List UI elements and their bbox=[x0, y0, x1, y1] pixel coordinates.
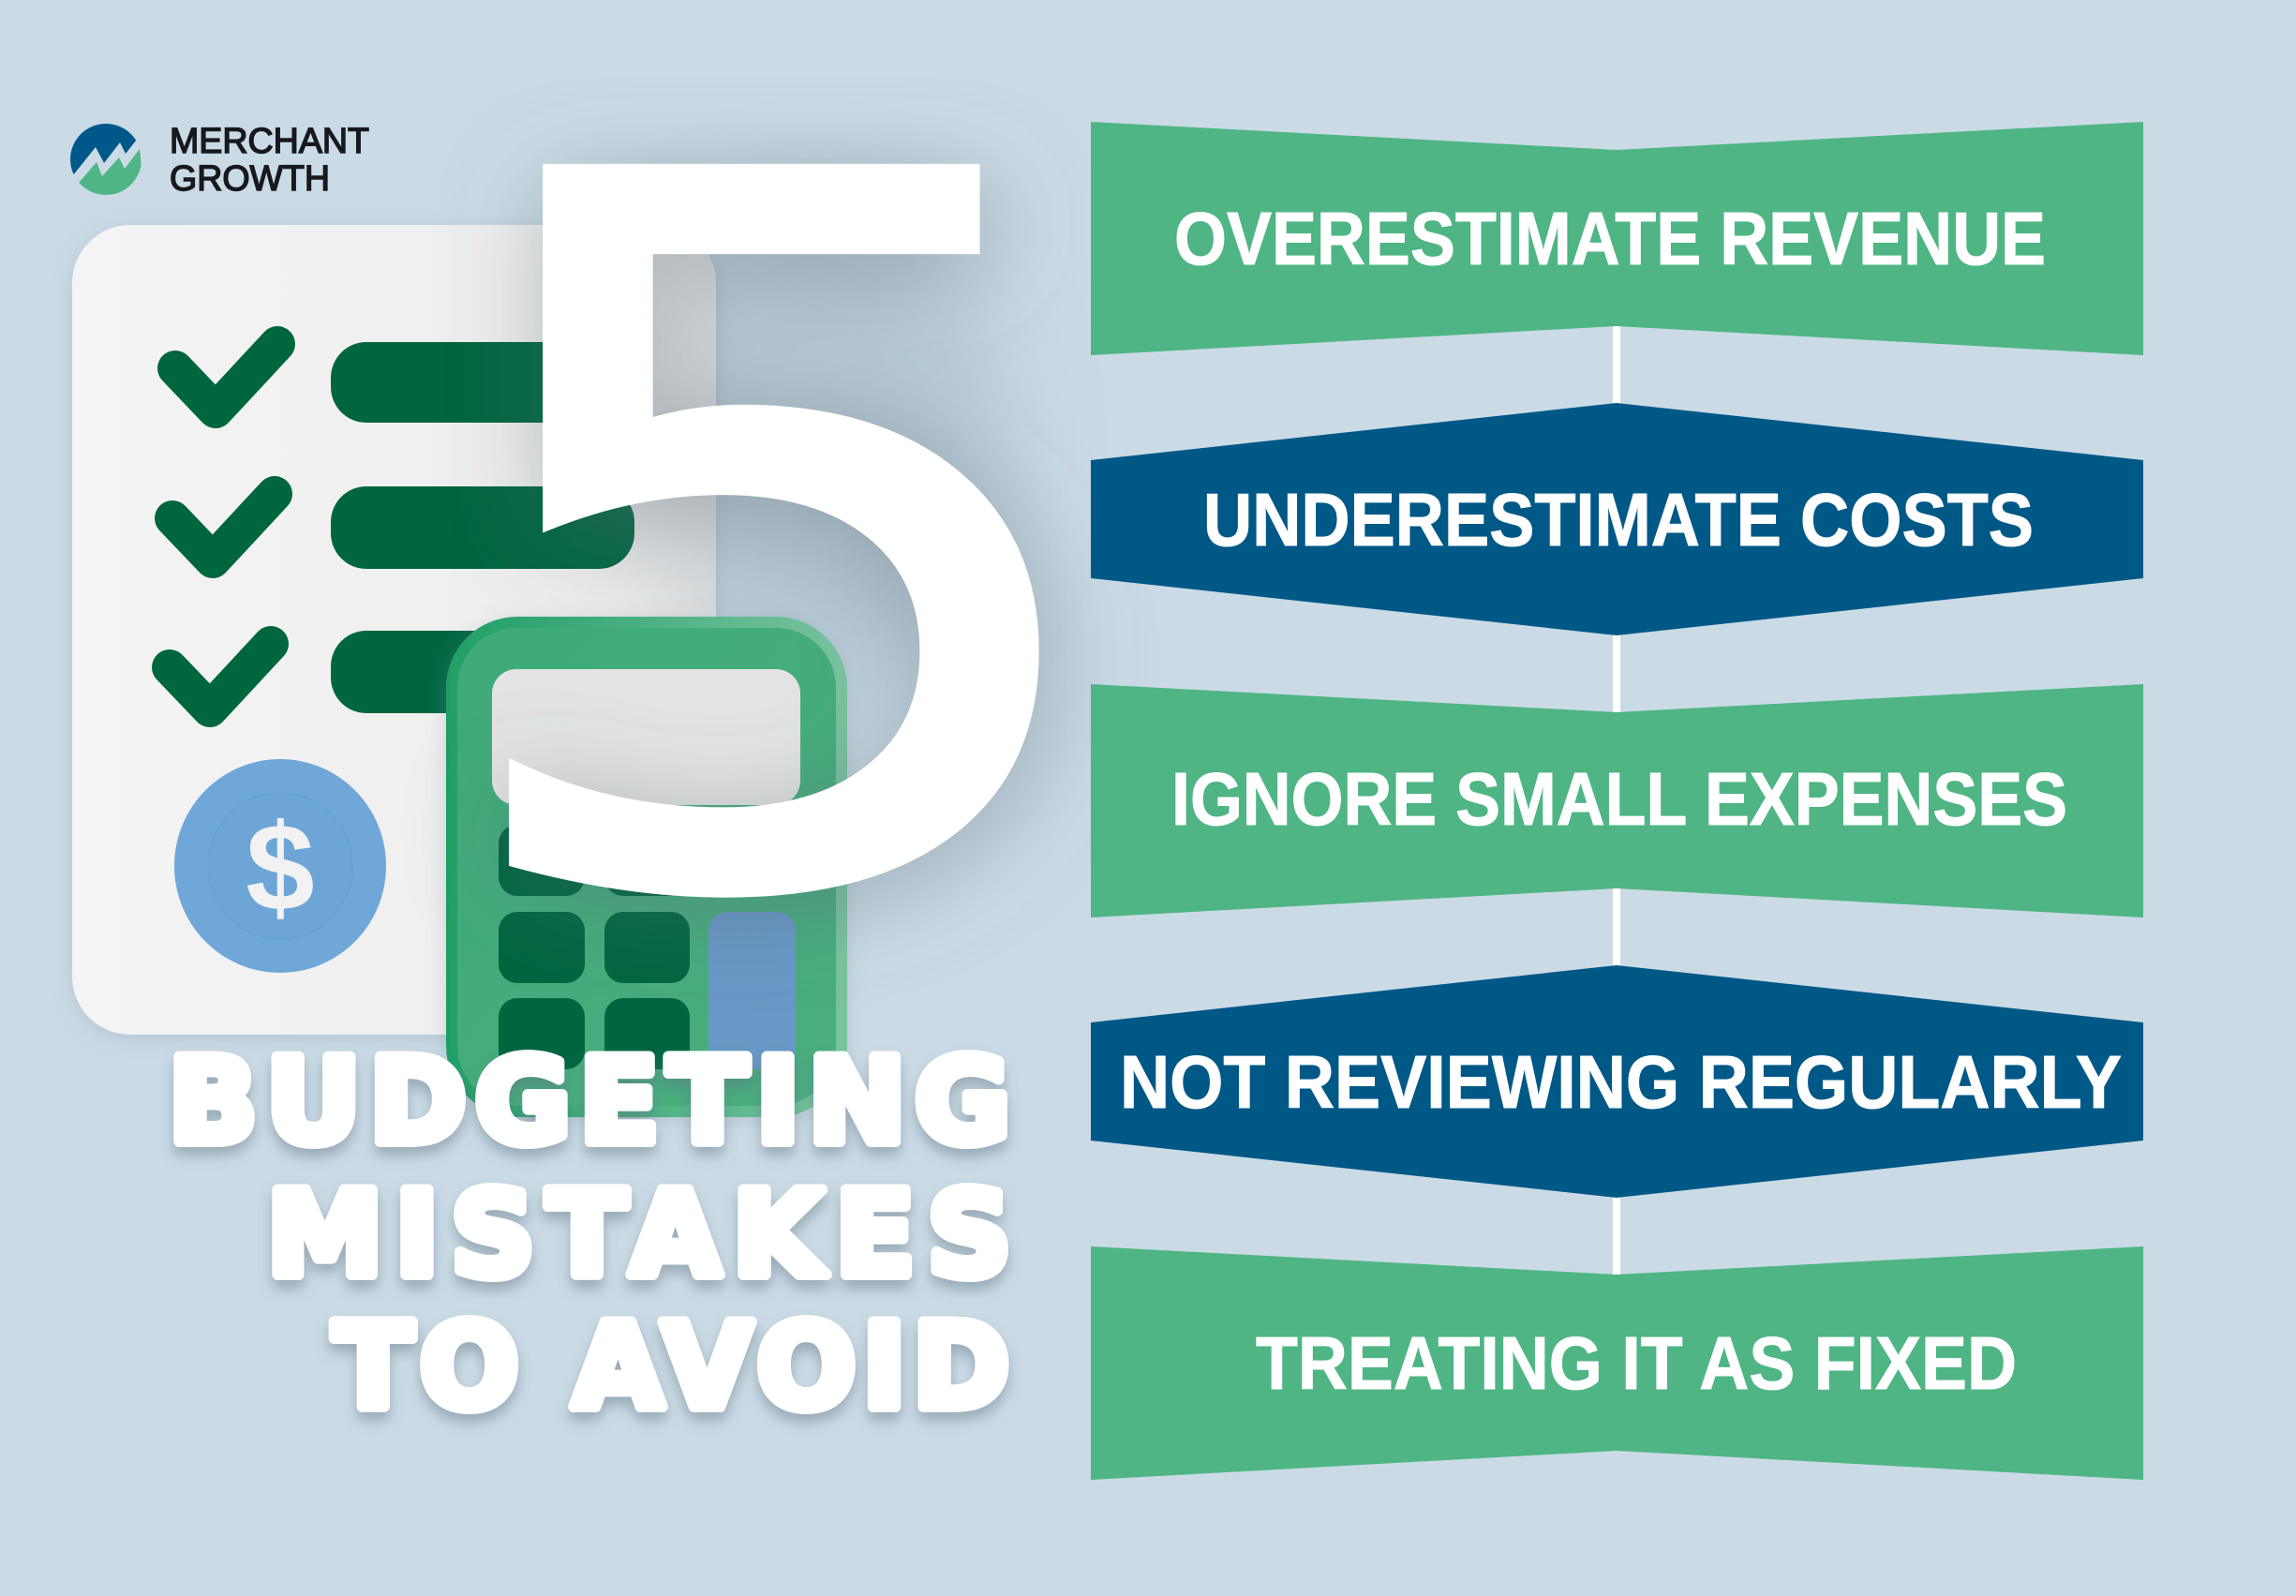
step 2: underestimate costs: UNDERESTIMATE COSTS bbox=[1203, 478, 2034, 561]
title: Budgeting Mistakes To Avoid: BUDGETING bbox=[169, 1035, 1010, 1170]
icon: dollar coin bbox=[174, 759, 386, 973]
title: Budgeting Mistakes To Avoid: TO AVOID bbox=[334, 1300, 1009, 1435]
illustration: checklist paper bbox=[72, 225, 716, 1035]
title: Budgeting Mistakes To Avoid: MISTAKES bbox=[267, 1168, 1011, 1303]
logo wordmark: GROWTH bbox=[170, 159, 330, 199]
step 5: treating it as fixed bbox=[1091, 1246, 2143, 1480]
step 1: overestimate revenue bbox=[1091, 122, 2143, 355]
step 4: not reviewing regularly bbox=[1091, 965, 2143, 1198]
soft shadow behind numeral bbox=[628, 197, 1003, 703]
logo wordmark: MERCHANT bbox=[170, 122, 369, 161]
step 3: ignore small expenses bbox=[1091, 684, 2143, 917]
calculator blue key bbox=[708, 912, 796, 1069]
big numeral 5: 5 bbox=[429, 0, 1130, 1110]
step 3: ignore small expenses: IGNORE SMALL EXPENSES bbox=[1171, 757, 2067, 841]
check marks bbox=[170, 344, 277, 709]
paper sheet bbox=[72, 225, 716, 1035]
list bars bbox=[331, 342, 634, 713]
icon: dollar coin: $ bbox=[246, 798, 315, 936]
step 4: not reviewing regularly: NOT REVIEWING REGULARLY bbox=[1120, 1040, 2122, 1124]
calculator screen bbox=[492, 669, 800, 805]
calculator keys bbox=[499, 825, 690, 1069]
step 2: underestimate costs bbox=[1091, 403, 2143, 635]
step 1: overestimate revenue: OVERESTIMATE REVENUE bbox=[1174, 197, 2046, 280]
calculator body bbox=[446, 617, 847, 1117]
icon: logo mountain circle bbox=[70, 124, 142, 195]
logo: Merchant Growth bbox=[70, 124, 369, 195]
logo wordmark bbox=[170, 122, 369, 199]
illustration: calculator bbox=[446, 617, 847, 1117]
connector lines bbox=[1613, 319, 1620, 1279]
step 5: treating it as fixed: TREATING IT AS FIXED bbox=[1256, 1321, 2017, 1405]
title: Budgeting Mistakes To Avoid bbox=[169, 1035, 1011, 1435]
